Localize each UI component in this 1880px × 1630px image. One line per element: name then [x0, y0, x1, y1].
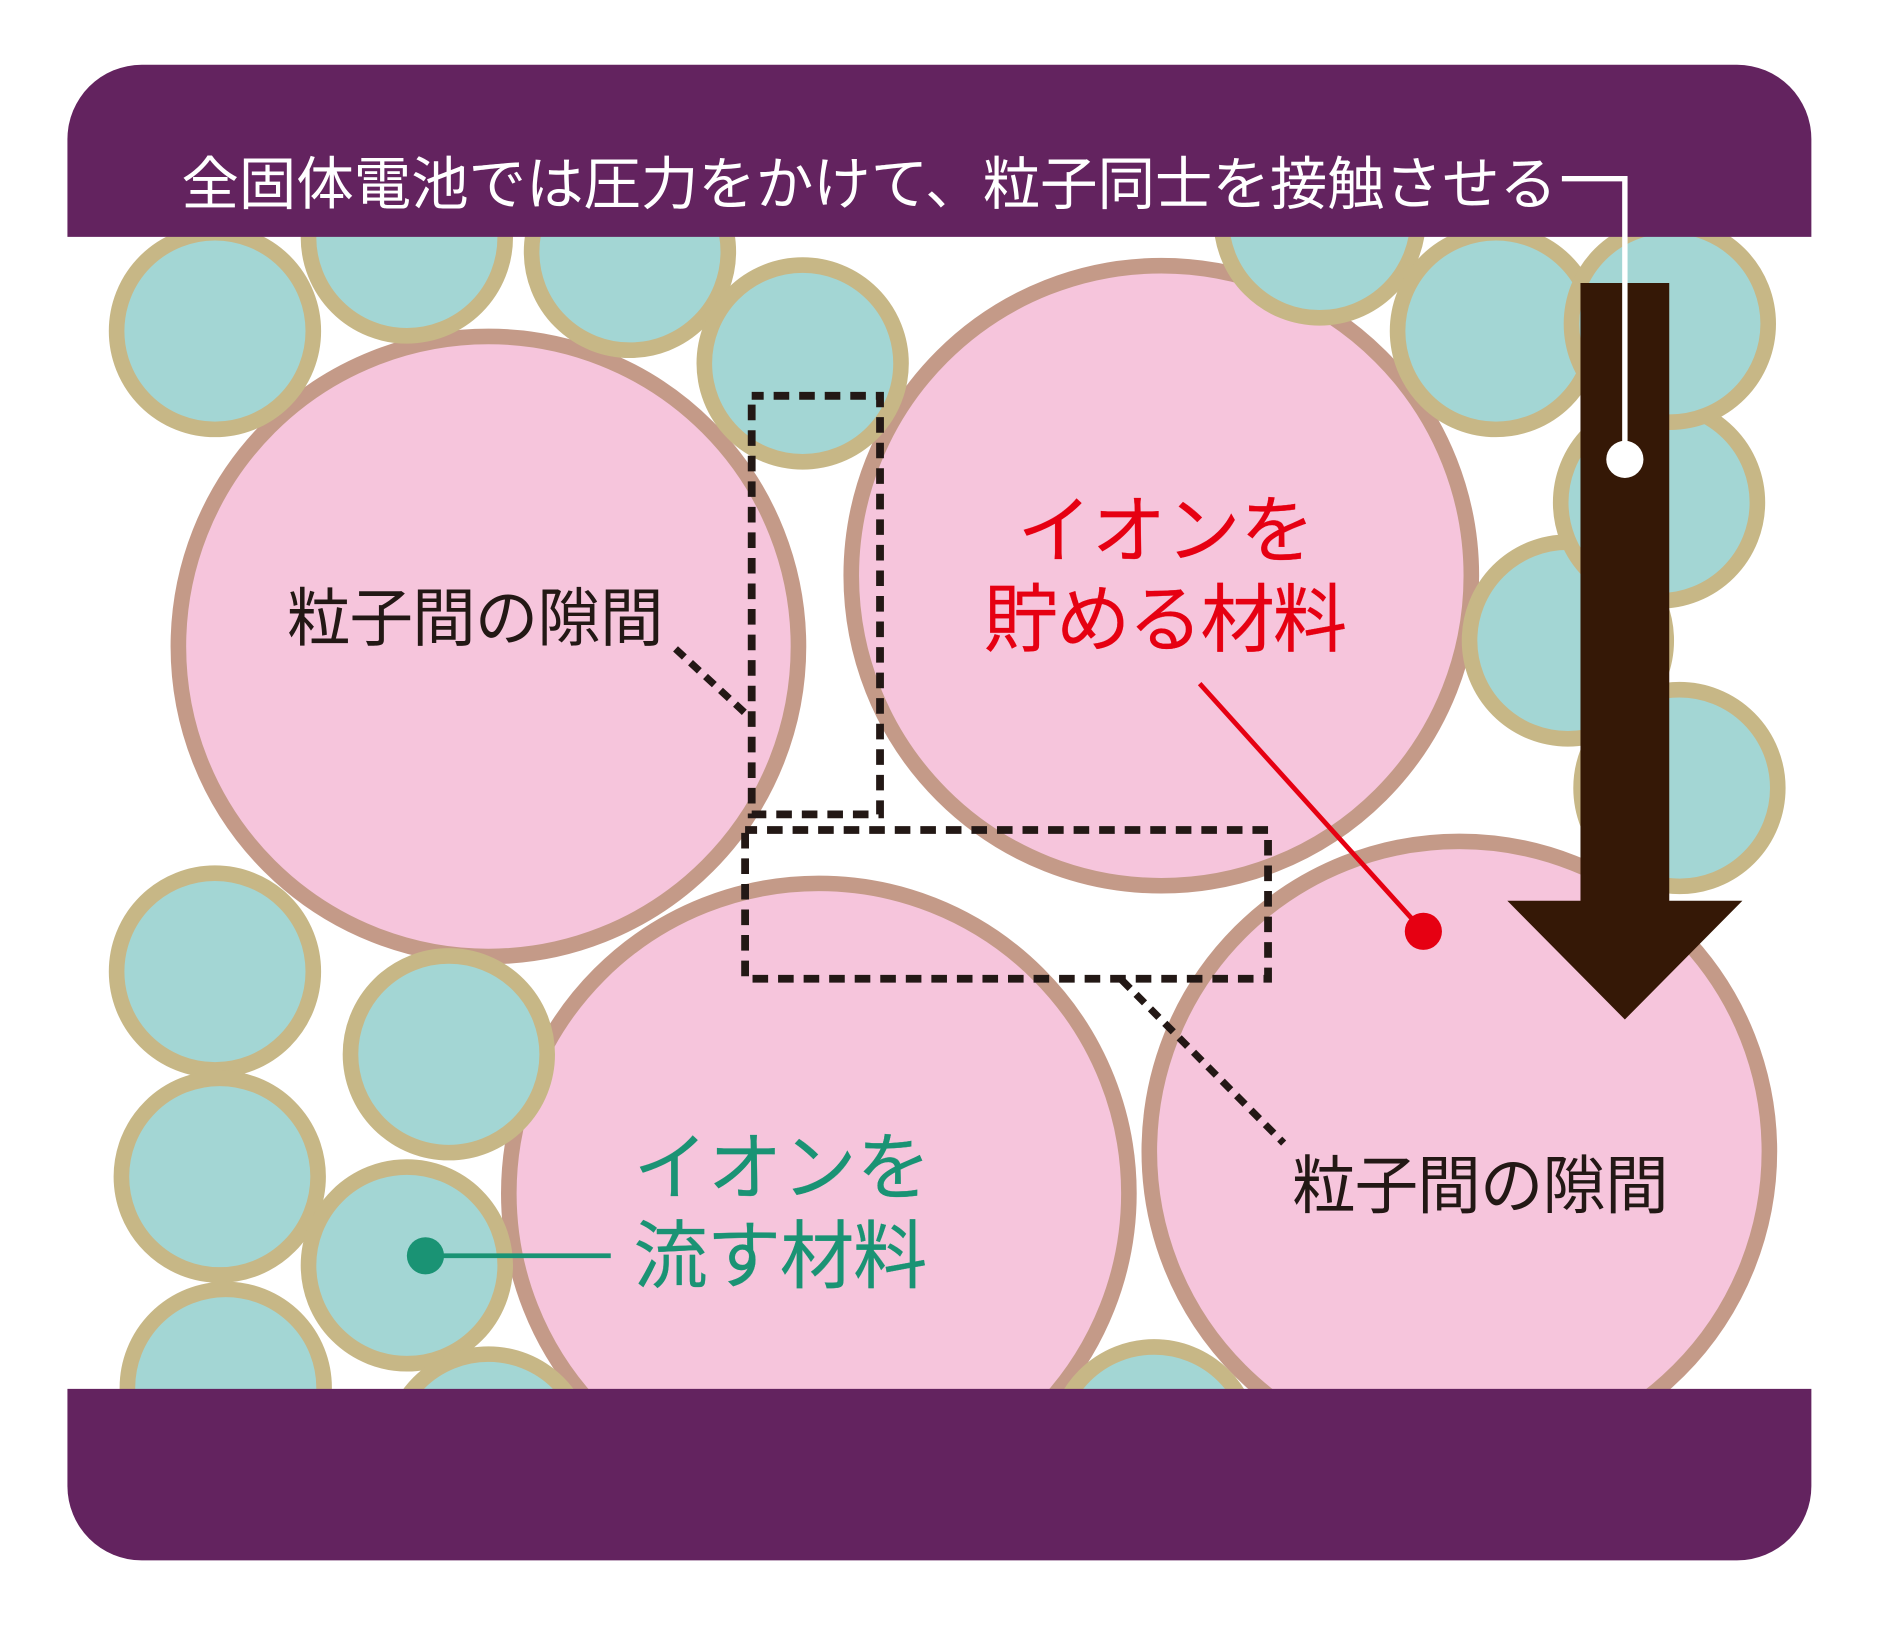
bottom electrode bar	[67, 1389, 1811, 1560]
small teal particles: ion conducting material	[117, 121, 1778, 1551]
label: lower particle gap: 粒子間の隙間	[1292, 1151, 1669, 1222]
dashed box: horizontal gap between particles	[745, 830, 1268, 979]
label: ion storage material: 貯める材料	[984, 578, 1347, 661]
label: upper particle gap: 粒子間の隙間	[287, 583, 664, 654]
large pink particles: ion storage material	[178, 266, 1769, 1503]
callout: green leader with dot	[407, 1237, 611, 1274]
callout: pressure leader with dot	[1562, 179, 1643, 478]
arrow: pressure	[1507, 283, 1742, 1019]
label: ion conducting material: 流す材料	[634, 1215, 927, 1298]
dashed box: vertical gap between particles	[752, 396, 880, 814]
dashed leader: upper gap label	[676, 649, 752, 720]
label: ion conducting material: イオンを	[634, 1126, 931, 1209]
label: ion storage material: イオンを	[1017, 490, 1315, 573]
label: ion conducting material	[634, 1126, 931, 1298]
top electrode bar	[67, 65, 1811, 237]
dashed leader: lower gap label	[1122, 980, 1284, 1143]
heading: pressure statement: 全固体電池では圧力をかけて、粒子同士を接触させる	[181, 153, 1557, 217]
callout: red leader with dot	[1200, 684, 1442, 950]
label: ion storage material	[984, 490, 1347, 661]
